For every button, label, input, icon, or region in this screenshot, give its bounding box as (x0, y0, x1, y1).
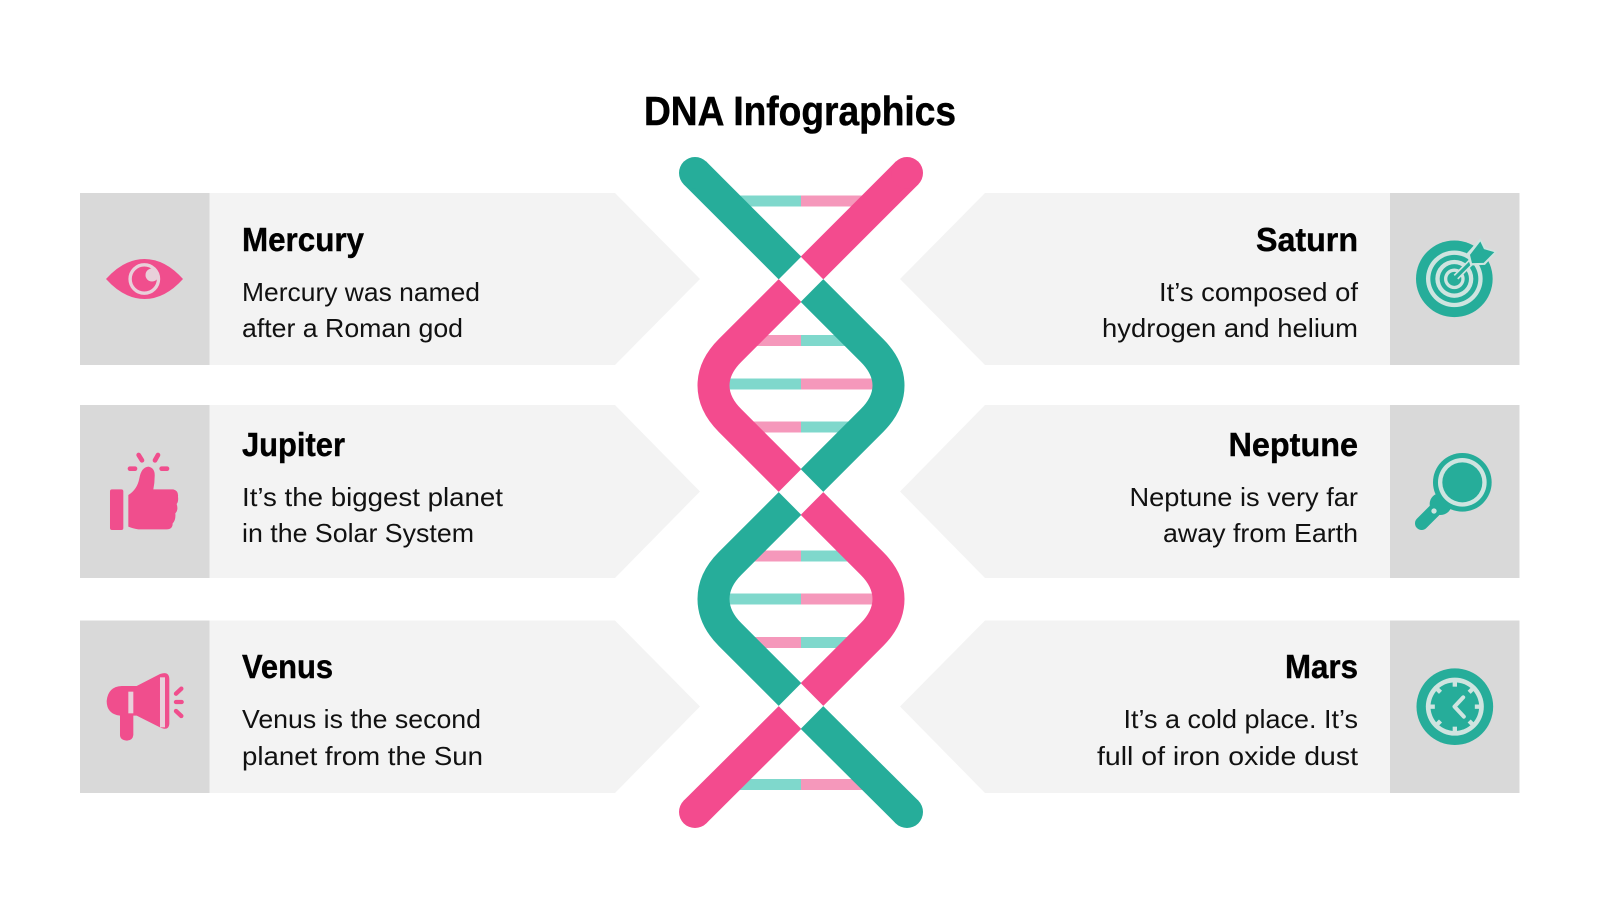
pink strand (679, 157, 923, 828)
panel: Neptune (900, 405, 1520, 578)
text: Jupiter description: in the Solar System (242, 518, 474, 548)
heading: Venus: Venus (242, 648, 333, 685)
text: Mercury description: after a Roman god (242, 313, 463, 343)
text: Neptune description: away from Earth (1163, 518, 1358, 548)
panel: Jupiter (80, 405, 700, 578)
text: Saturn description: hydrogen and helium (1102, 313, 1358, 343)
panel: Venus (80, 620, 700, 793)
teal strand (679, 157, 923, 828)
title: DNA Infographics (644, 88, 956, 134)
rungs (725, 196, 877, 790)
panel: Mercury (80, 193, 700, 365)
text: Saturn description (1102, 277, 1359, 343)
chart: DNA double helix (679, 157, 923, 828)
icon: megaphone (107, 673, 182, 741)
icon: eye (106, 259, 183, 299)
icon: target (1416, 238, 1497, 317)
text: Neptune description: Neptune is very far (1130, 482, 1358, 512)
icon: magnifying glass (1422, 453, 1492, 523)
text: Venus description: Venus is the second (242, 704, 481, 734)
text: Mercury description (242, 277, 480, 343)
heading: Saturn: Saturn (1256, 221, 1358, 258)
panel: Saturn (900, 193, 1520, 365)
icon: clock (1416, 668, 1493, 745)
heading: Neptune: Neptune (1228, 426, 1358, 463)
text: Jupiter description (242, 482, 504, 548)
text: Mars description: It’s a cold place. It’s (1124, 704, 1358, 734)
heading: Mars: Mars (1285, 648, 1358, 685)
panel: Mars (900, 620, 1520, 793)
text: Venus description (242, 704, 483, 771)
text: Jupiter description: It’s the biggest planet (242, 482, 504, 512)
text: Venus description: planet from the Sun (242, 741, 483, 771)
heading: Jupiter: Jupiter (242, 426, 345, 463)
text: Mars description: full of iron oxide dust (1097, 741, 1359, 771)
heading: Mercury: Mercury (242, 221, 365, 258)
text: Saturn description: It’s composed of (1159, 277, 1359, 307)
text: Neptune description (1130, 482, 1358, 548)
text: Mars description (1097, 704, 1359, 771)
icon: thumbs up (110, 455, 178, 530)
text: Mercury description: Mercury was named (242, 277, 480, 307)
